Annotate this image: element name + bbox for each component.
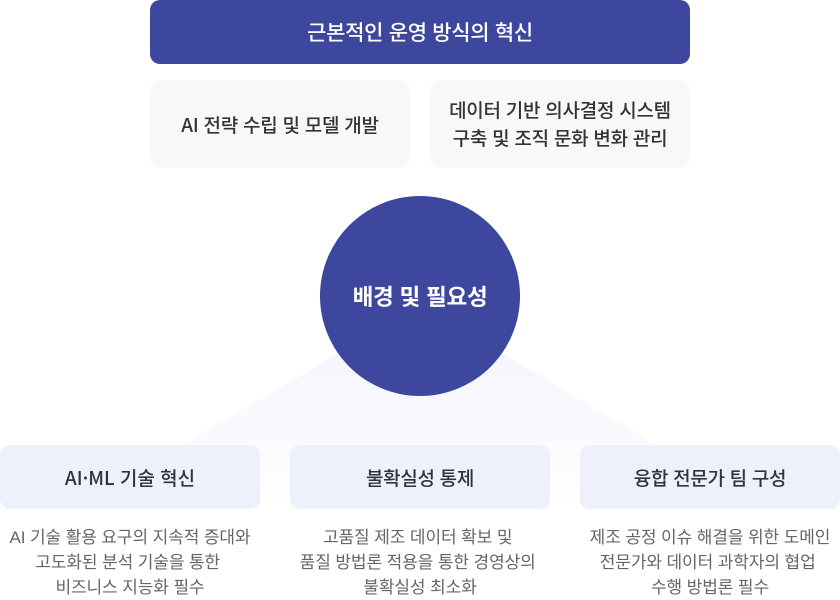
description: AI/ML: 비즈니스 지능화 필수 (55, 578, 205, 597)
description: AI/ML: AI 기술 활용 요구의 지속적 증대와 (10, 528, 250, 547)
box: data-driven decision system: 구축 및 조직 문화 변화 관리 (453, 129, 667, 150)
central circle: 배경 및 필요성 (353, 284, 487, 310)
box: AI strategy (150, 80, 410, 168)
description: team: 전문가와 데이터 과학자의 협업 (600, 553, 816, 572)
top banner (150, 0, 690, 64)
card: team (580, 445, 840, 509)
box: data-driven decision system: 데이터 기반 의사결정 시스템 (449, 101, 671, 122)
description: uncertainty (300, 528, 536, 597)
card: uncertainty: 불확실성 통제 (366, 468, 474, 490)
card: AI/ML: AI·ML 기술 혁신 (65, 464, 195, 490)
card: team: 융합 전문가 팀 구성 (634, 468, 786, 490)
box: data-driven decision system (430, 80, 690, 168)
central circle (320, 196, 520, 396)
description: team: 수행 방법론 필수 (651, 578, 769, 597)
description: uncertainty: 품질 방법론 적용을 통한 경영상의 (300, 553, 536, 572)
description: uncertainty: 고품질 제조 데이터 확보 및 (323, 528, 512, 547)
box: AI strategy: AI 전략 수립 및 모델 개발 (181, 111, 379, 138)
description: team: 제조 공정 이슈 해결을 위한 도메인 (590, 528, 830, 547)
top banner: 근본적인 운영 방식의 혁신 (307, 22, 533, 45)
card: AI/ML (0, 445, 260, 509)
card: uncertainty (290, 445, 550, 509)
description: uncertainty: 불확실성 최소화 (363, 578, 477, 597)
description: AI/ML (10, 528, 250, 597)
description: AI/ML: 고도화된 분석 기술을 통한 (35, 553, 220, 572)
description: team (590, 528, 830, 597)
